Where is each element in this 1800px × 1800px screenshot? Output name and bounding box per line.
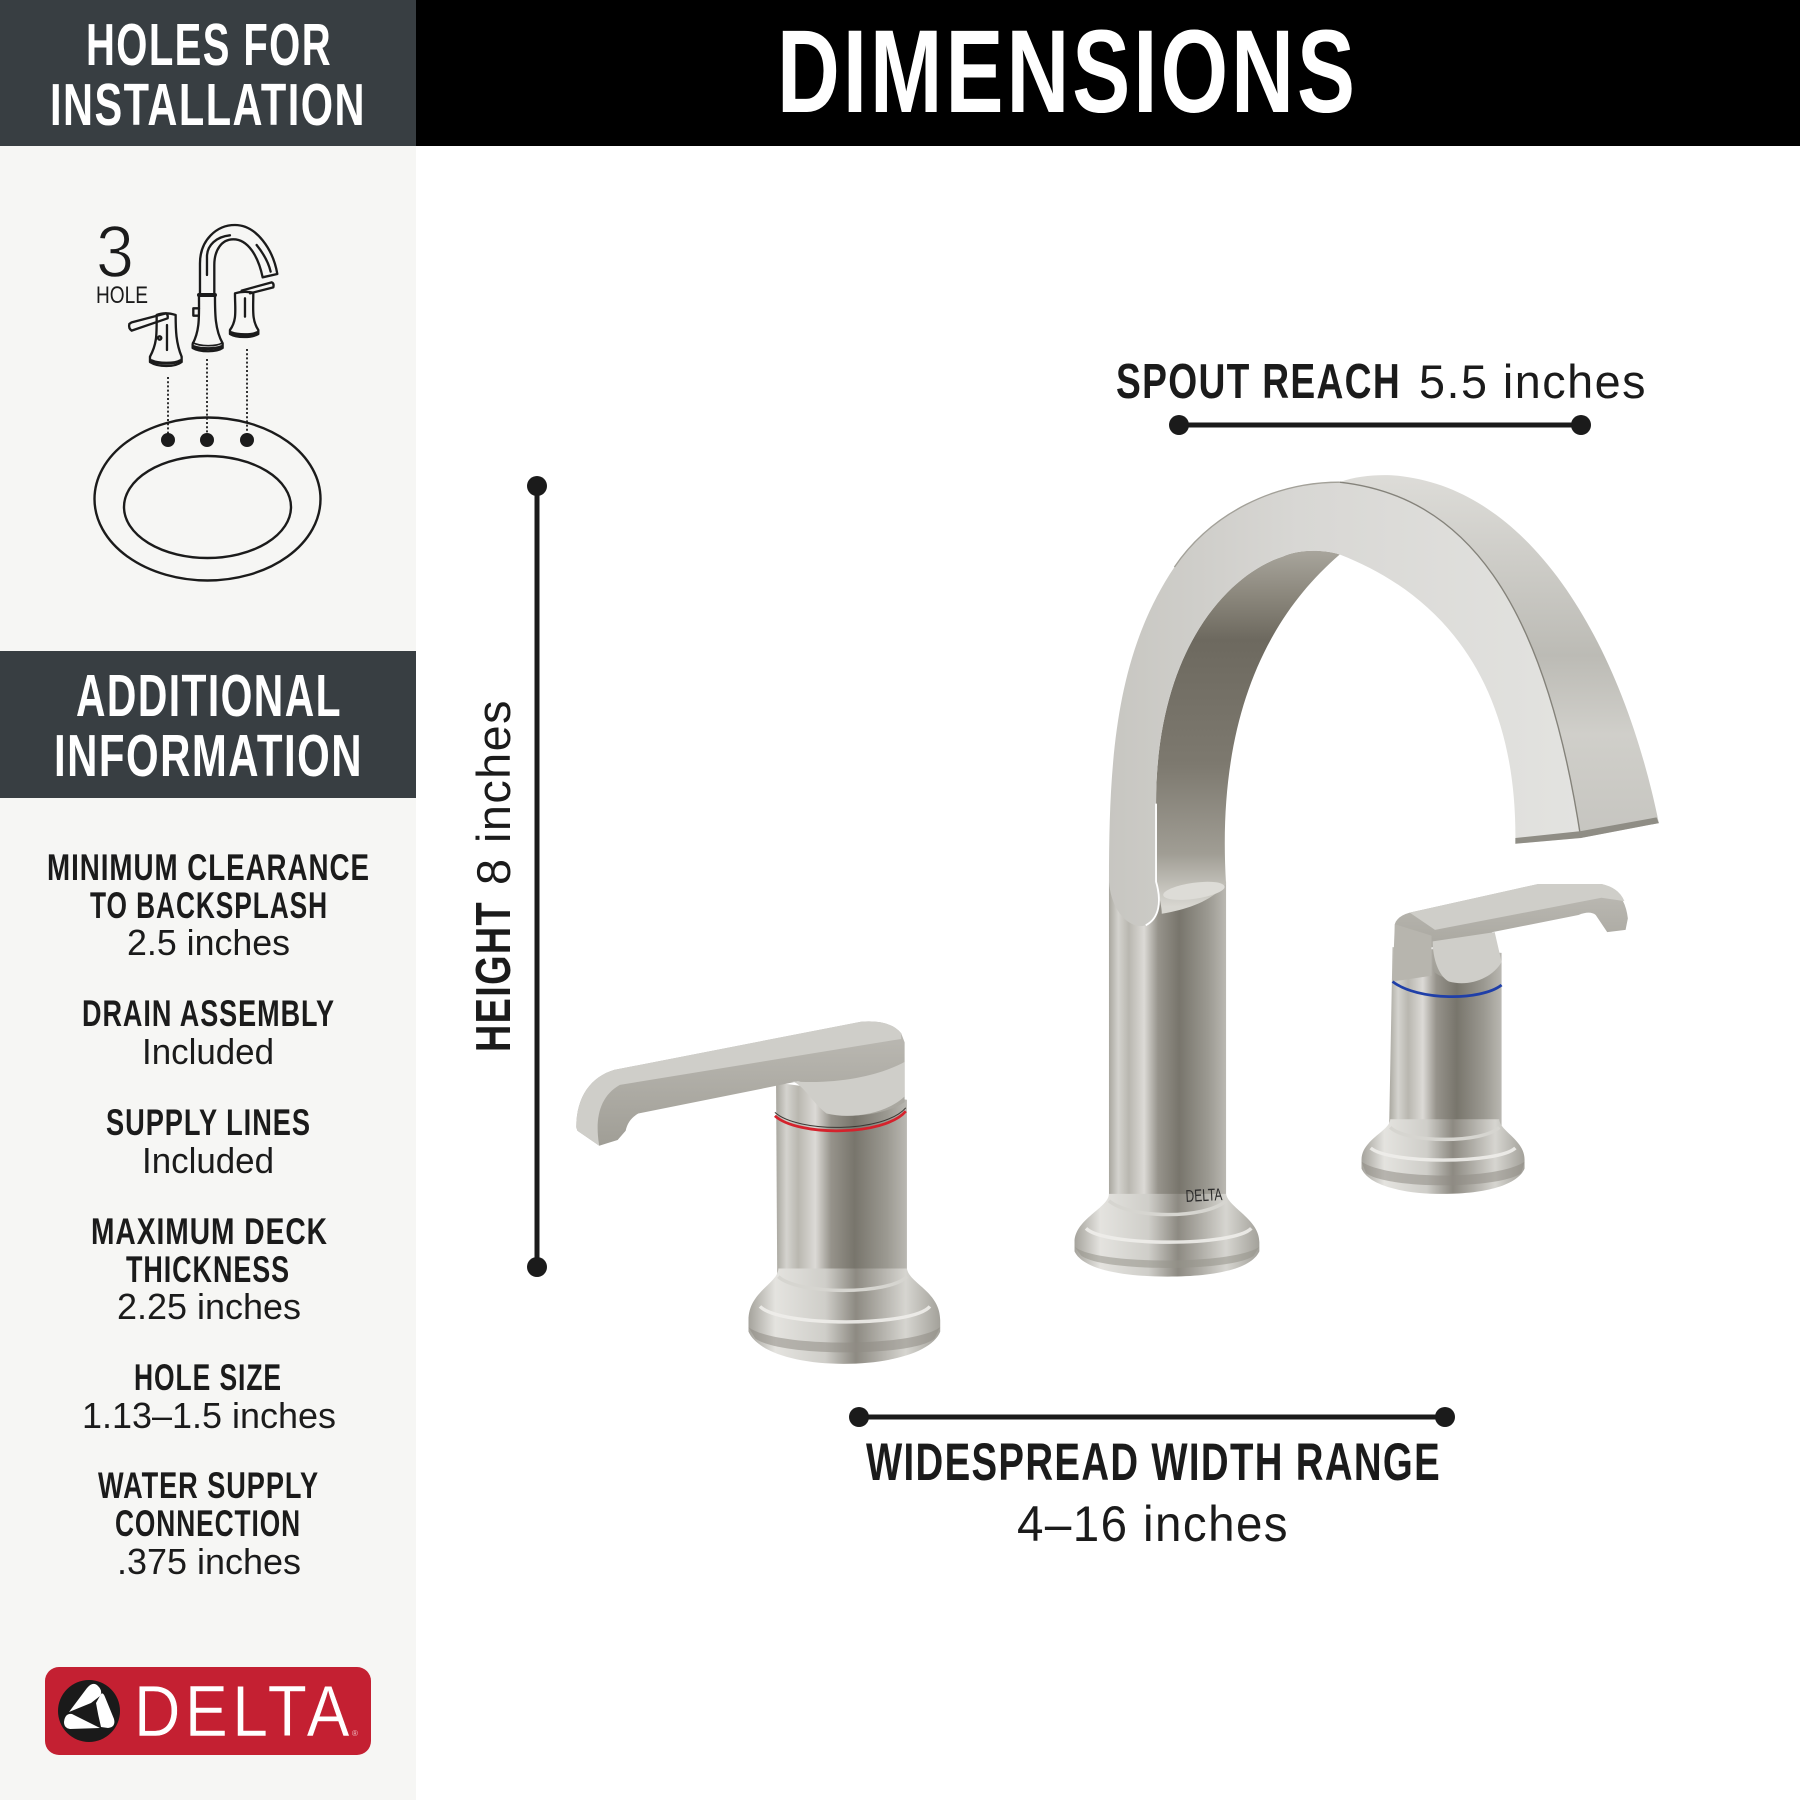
text: water supply connection: .375 inches [117, 1541, 301, 1582]
icon: 3 hole sink installation: HOLE [96, 282, 148, 309]
dimension: height: HEIGHT [467, 901, 521, 1052]
dimension: widespread width range: WIDESPREAD WIDTH RANGE [866, 1433, 1441, 1492]
dimension: widespread width range [849, 1407, 1455, 1552]
text: maximum deck thickness: THICKNESS [126, 1249, 290, 1290]
collar highlight [1162, 879, 1226, 903]
icon: 3 hole sink installation: 3 [96, 212, 134, 293]
text: water supply connection: WATER SUPPLY [98, 1465, 319, 1506]
spout front face [1109, 482, 1581, 926]
text: hole size: 1.13–1.5 inches [82, 1395, 336, 1436]
faucet: left hot handle [576, 1021, 940, 1364]
faucet: spout and body [1075, 475, 1659, 1277]
title: dimensions [416, 0, 1800, 146]
text: minimum clearance: MINIMUM CLEARANCE [47, 847, 370, 888]
dimension: widespread width range: 4–16 inches [1017, 1496, 1289, 1552]
dimension: spout reach: SPOUT REACH [1116, 355, 1401, 409]
text: drain assembly: DRAIN ASSEMBLY [82, 993, 335, 1034]
lever [576, 1021, 905, 1146]
lever [1395, 884, 1628, 980]
dimension: spout reach: 5.5 inches [1419, 355, 1647, 408]
icon: 3 hole sink installation [94, 212, 320, 580]
text: maximum deck thickness [91, 1211, 328, 1327]
heading: holes for installation [0, 0, 416, 146]
text: minimum clearance [47, 847, 370, 963]
sidebar background [0, 0, 416, 1800]
inner dark face of arch [1156, 551, 1340, 914]
text: supply lines [106, 1102, 311, 1181]
heading: holes for installation: HOLES FOR [86, 12, 332, 78]
heading: additional information: INFORMATION [54, 723, 363, 789]
dimension: height [467, 476, 547, 1277]
faucet: spout and body: DELTA [1185, 1184, 1223, 1206]
text: supply lines: SUPPLY LINES [106, 1102, 311, 1143]
text: water supply connection: CONNECTION [115, 1503, 301, 1544]
logo: delta: ® [352, 1729, 358, 1738]
heading: additional information [0, 651, 416, 798]
text: maximum deck thickness: 2.25 inches [117, 1286, 301, 1327]
dimension: height: 8 inches [467, 699, 520, 885]
base [1075, 1194, 1259, 1277]
heading: additional information: ADDITIONAL [76, 663, 342, 729]
faucet: right cold handle [1362, 884, 1628, 1194]
spout side face [1340, 475, 1659, 838]
text: hole size: HOLE SIZE [134, 1357, 282, 1398]
text: hole size [82, 1357, 336, 1436]
text: drain assembly [82, 993, 335, 1072]
text: maximum deck thickness: MAXIMUM DECK [91, 1211, 328, 1252]
logo: delta: DELTA [134, 1672, 354, 1752]
text: water supply connection [98, 1465, 319, 1582]
heading: holes for installation: INSTALLATION [50, 72, 366, 138]
text: minimum clearance: 2.5 inches [127, 922, 290, 963]
text: minimum clearance: TO BACKSPLASH [90, 885, 328, 926]
text: supply lines: Included [142, 1140, 274, 1181]
title: dimensions: DIMENSIONS [777, 6, 1358, 138]
dimension: spout reach [1116, 355, 1647, 435]
text: drain assembly: Included [142, 1031, 274, 1072]
shaft [1109, 882, 1226, 1217]
logo: delta [45, 1667, 371, 1755]
